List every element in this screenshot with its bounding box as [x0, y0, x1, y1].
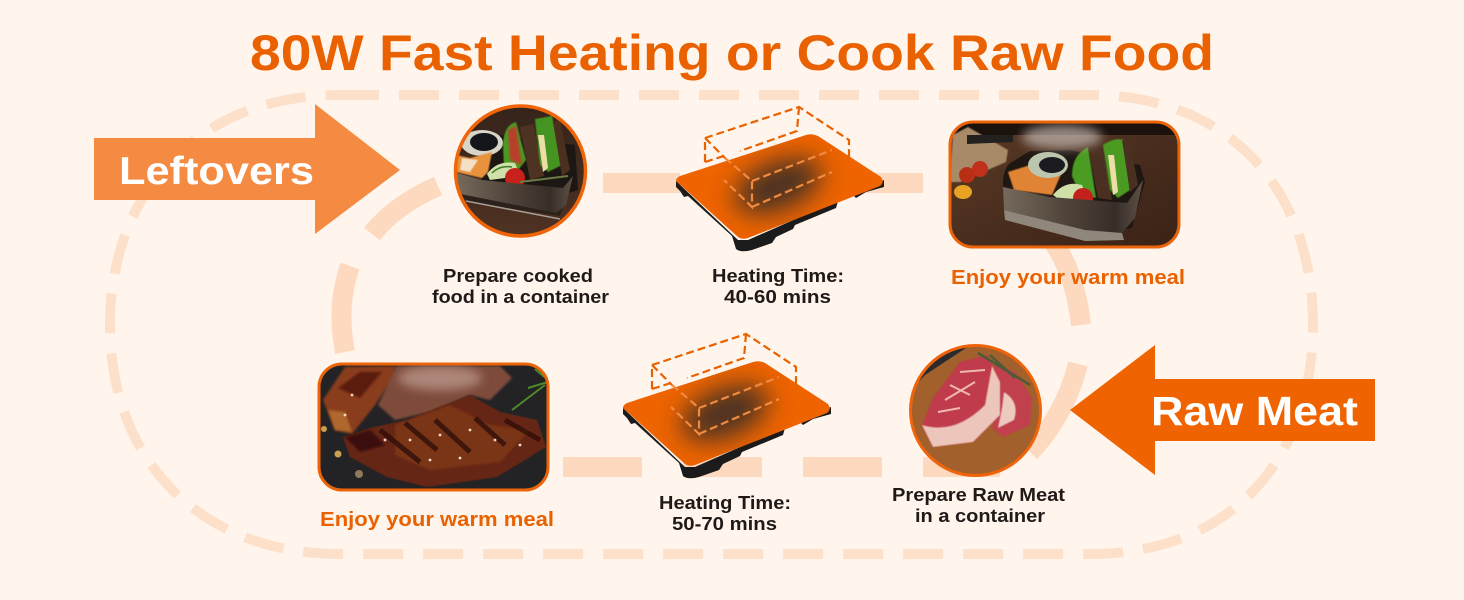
- heater: leftovers: [676, 107, 884, 251]
- caption: heating time 40-60: 40-60 mins: [724, 287, 831, 307]
- caption: heating time 40-60: Heating Time:: [712, 266, 844, 286]
- arrow label: leftovers: Leftovers: [119, 150, 314, 193]
- caption: heating time 50-70: 50-70 mins: [672, 514, 777, 534]
- caption: heating time 50-70: Heating Time:: [659, 493, 791, 513]
- outer dashed loop: [110, 95, 1313, 554]
- caption: prepare raw meat: Prepare Raw Meat: [892, 485, 1065, 505]
- caption: enjoy meal bottom: Enjoy your warm meal: [320, 509, 554, 531]
- caption: prepare cooked food: food in a container: [432, 287, 609, 307]
- arrow label: raw meat: Raw Meat: [1151, 388, 1358, 434]
- caption: prepare raw meat: in a container: [915, 506, 1045, 526]
- photo: raw meat circle: [909, 344, 1043, 478]
- arrow: leftovers: [94, 104, 400, 234]
- caption: enjoy meal top: Enjoy your warm meal: [951, 267, 1185, 289]
- photo: grilled steak: [319, 364, 548, 490]
- heater: raw meat: [623, 334, 831, 478]
- caption: heating time 40-60: [712, 266, 844, 307]
- photo: cooked food circle: [455, 105, 587, 237]
- caption: prepare cooked food: [432, 266, 609, 307]
- photo: warm leftovers meal: [950, 122, 1179, 247]
- arrow: raw meat: [1070, 345, 1375, 475]
- inner dashed loop: [341, 183, 1081, 467]
- caption: prepare raw meat: [892, 485, 1065, 526]
- dashed box: raw meat: [652, 334, 796, 434]
- dashed box: leftovers: [705, 107, 849, 207]
- caption: prepare cooked food: Prepare cooked: [443, 266, 593, 286]
- title: 80W Fast Heating or Cook Raw Food: [250, 25, 1214, 81]
- caption: heating time 50-70: [659, 493, 791, 534]
